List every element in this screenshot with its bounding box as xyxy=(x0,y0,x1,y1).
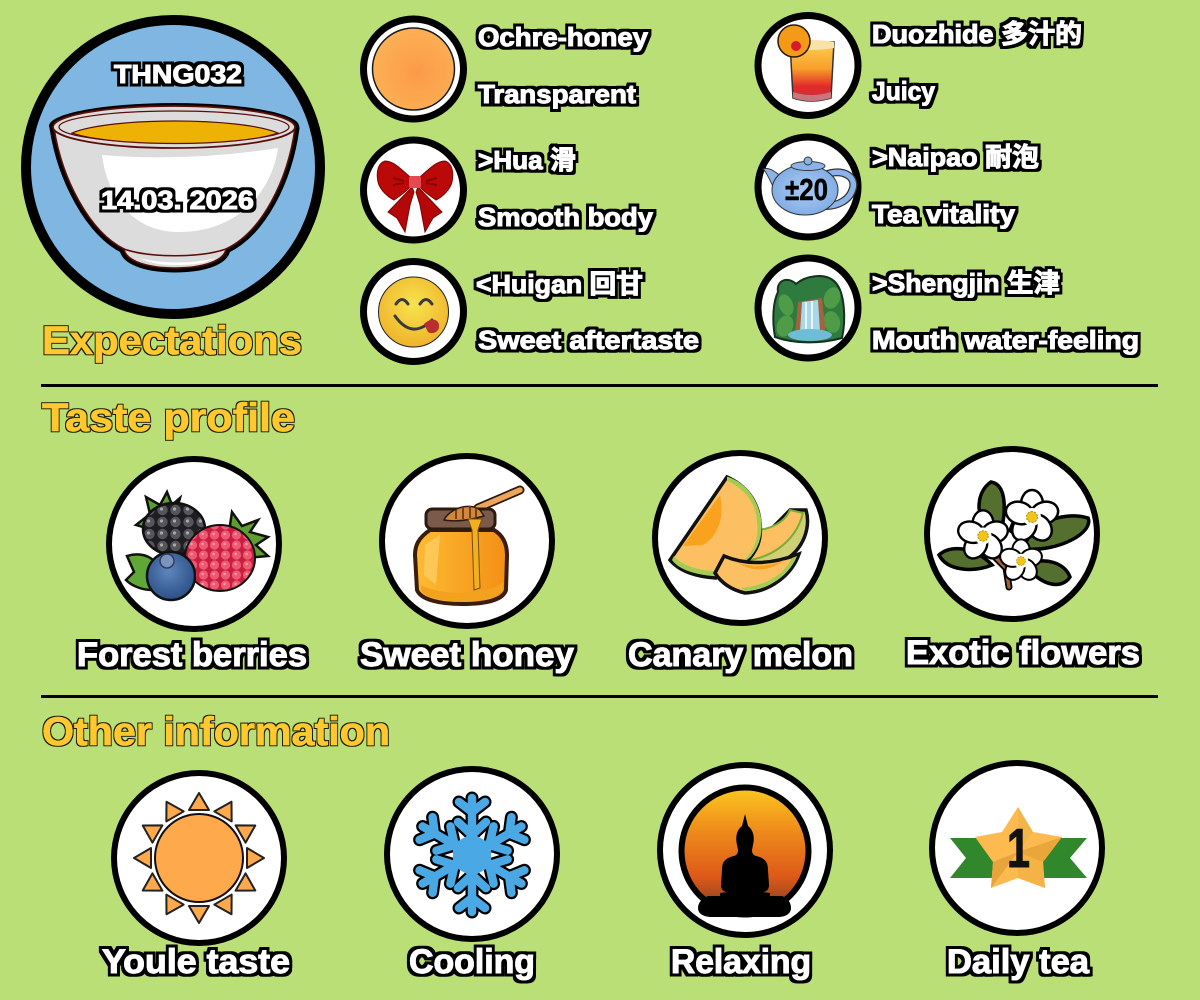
icon: teapot xyxy=(758,137,858,237)
label: ochre-honey: Ochre-honey xyxy=(478,22,649,52)
label: juicy: Juicy xyxy=(872,76,935,106)
label: transparent: Transparent xyxy=(478,79,636,109)
icon: melon slices xyxy=(655,453,825,623)
icon: star with ribbon: 1 xyxy=(1007,817,1030,879)
label: cooling: Cooling xyxy=(409,943,535,981)
label: forest berries: Forest berries xyxy=(77,636,307,674)
label: duozhide: Duozhide 多汁的 xyxy=(872,19,1082,49)
icon: ochre disc xyxy=(364,19,464,119)
heading: expectations: Expectations xyxy=(42,319,302,363)
icon: red bow xyxy=(364,140,464,240)
icon: jungle waterfall xyxy=(758,258,858,358)
expectation: naipao xyxy=(758,137,1039,237)
info: youle taste xyxy=(102,773,290,981)
date: 14.03. 2026 xyxy=(101,185,254,215)
heading: taste profile: Taste profile xyxy=(42,396,295,440)
info: daily tea xyxy=(932,763,1102,981)
expectation: duozhide xyxy=(758,16,1082,116)
icon: meditating silhouette xyxy=(660,765,830,935)
taste: sweet honey xyxy=(360,456,574,674)
expectation: shengjin xyxy=(758,258,1139,358)
label: relaxing: Relaxing xyxy=(671,943,811,981)
icon: smiling face xyxy=(364,262,464,362)
label: sweet honey: Sweet honey xyxy=(360,636,574,674)
heading: other information: Other information xyxy=(42,710,390,754)
expectation: hua xyxy=(364,140,654,240)
divider xyxy=(41,695,1158,698)
info: cooling xyxy=(387,769,557,981)
label: youle taste: Youle taste xyxy=(102,943,290,981)
icon: sun xyxy=(114,773,284,943)
icon: teapot: ±20 xyxy=(785,172,828,207)
divider xyxy=(41,384,1158,387)
label: hua: >Hua 滑 xyxy=(478,145,576,175)
icon: tea bowl xyxy=(49,103,299,268)
icon: honey jar xyxy=(382,456,552,626)
panel: tea badge xyxy=(26,20,320,314)
icon: berries xyxy=(109,459,279,629)
label: huigan: <Huigan 回甘 xyxy=(476,269,643,299)
label: shengjin: >Shengjin 生津 xyxy=(872,268,1060,298)
label: mouth water-feeling: Mouth water-feeling xyxy=(872,325,1139,355)
label: canary melon: Canary melon xyxy=(628,636,853,674)
taste: forest berries xyxy=(77,459,307,674)
label: naipao: >Naipao 耐泡 xyxy=(872,142,1039,172)
expectation: colour xyxy=(364,19,649,119)
icon: snowflake xyxy=(387,769,557,939)
info: relaxing xyxy=(660,765,830,981)
batch code: THNG032 xyxy=(114,59,242,89)
taste: canary melon xyxy=(628,453,853,674)
taste: exotic flowers xyxy=(906,449,1140,672)
expectation: huigan xyxy=(364,262,699,362)
label: daily tea: Daily tea xyxy=(947,943,1090,981)
label: exotic flowers: Exotic flowers xyxy=(906,634,1140,672)
badge disc xyxy=(26,20,320,314)
icon: juicy drink xyxy=(758,16,858,116)
label: sweet aftertaste: Sweet aftertaste xyxy=(478,325,699,355)
label: tea vitality: Tea vitality xyxy=(872,199,1016,229)
icon: star with ribbon xyxy=(932,763,1102,933)
label: smooth body: Smooth body xyxy=(478,202,654,232)
icon: white blossoms xyxy=(927,449,1097,619)
